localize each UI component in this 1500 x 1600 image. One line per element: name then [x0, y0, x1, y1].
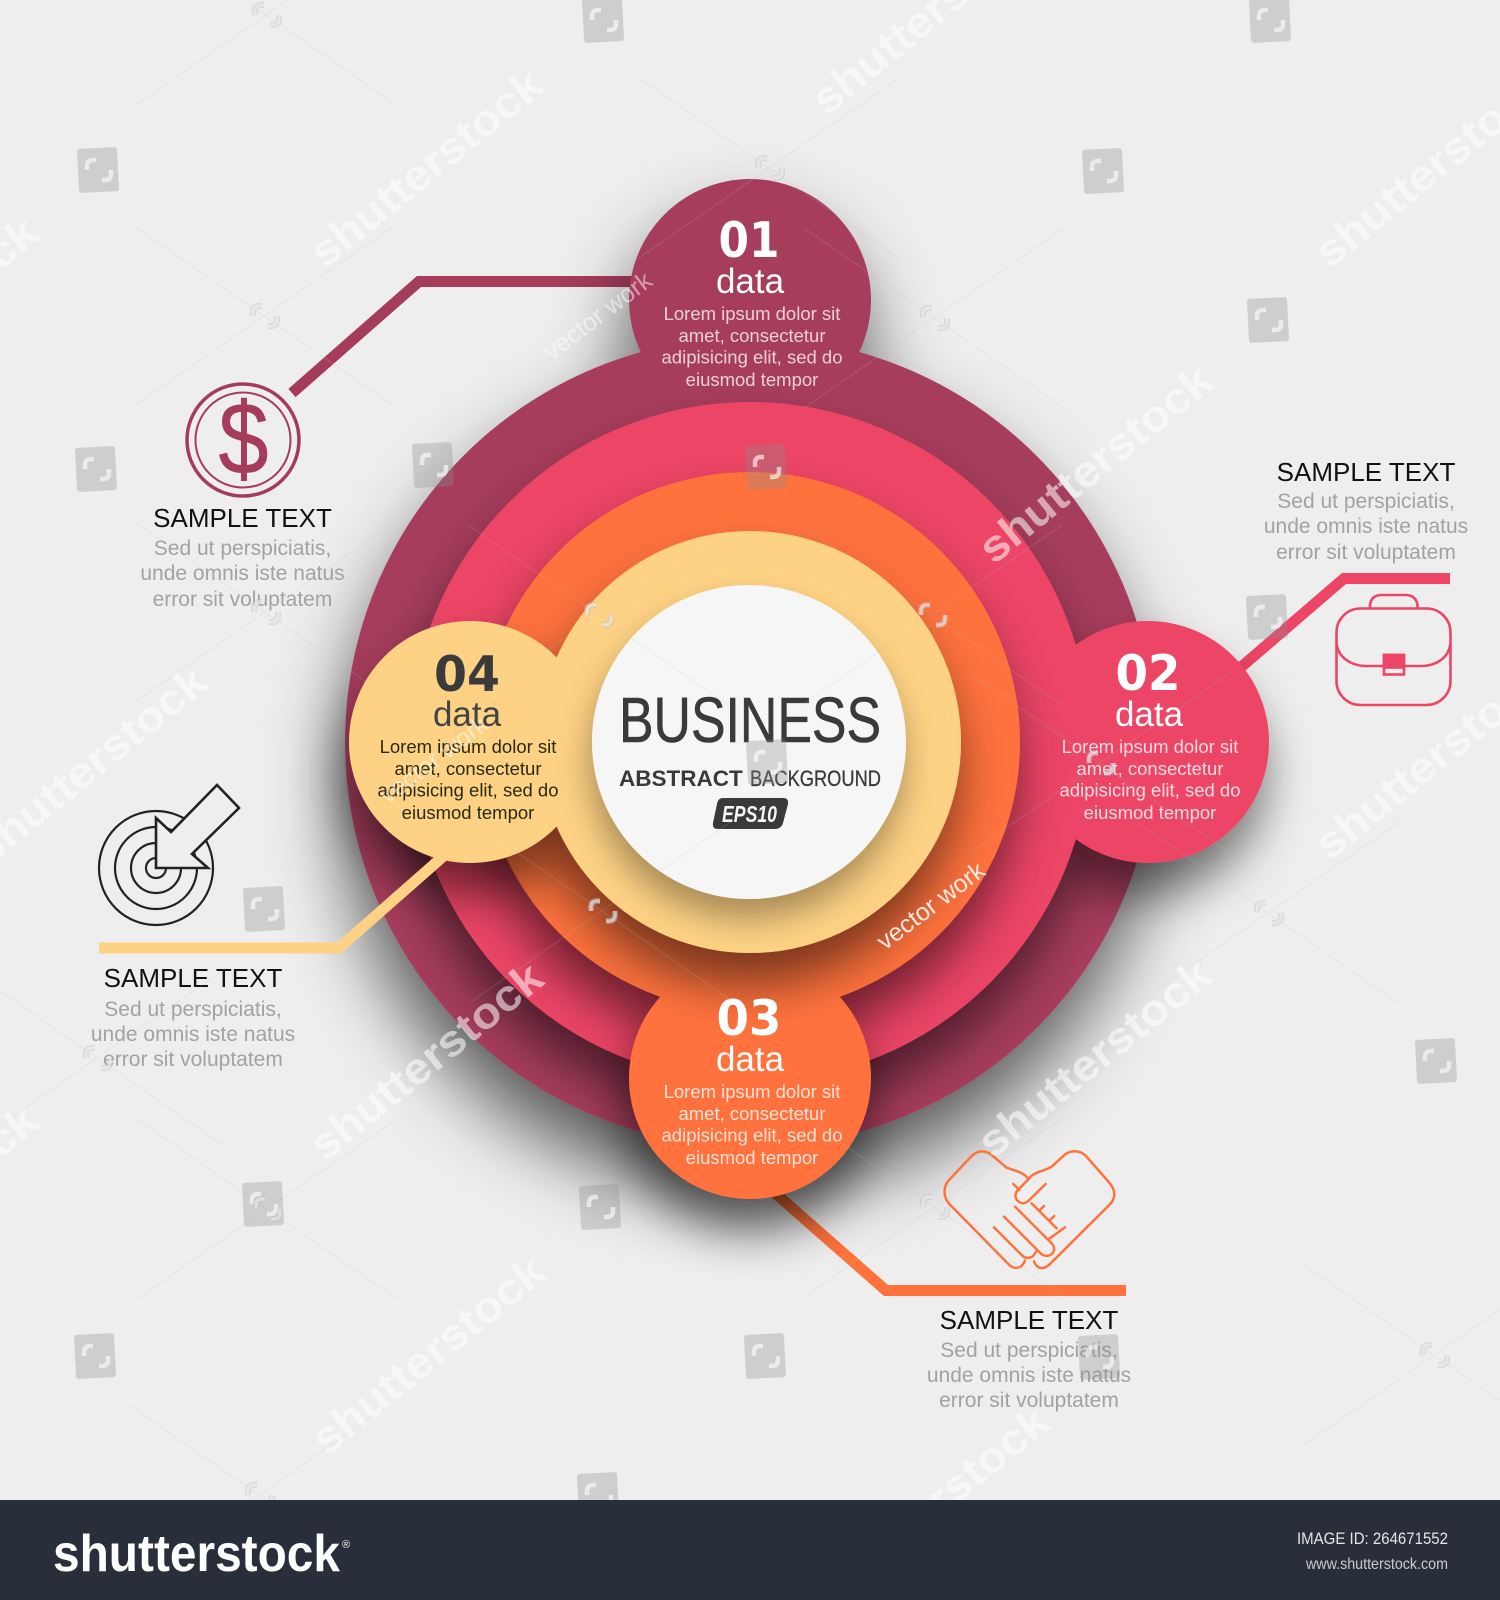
node 03 text: amet, consectetur	[678, 1103, 826, 1124]
text block: top left: Sed ut perspiciatis,	[154, 537, 331, 560]
text block: top right	[1264, 457, 1468, 564]
text block: top left: SAMPLE TEXT	[153, 503, 332, 533]
node 02 text: adipisicing elit, sed do	[1060, 780, 1240, 800]
footer image id: IMAGE ID: 264671552	[1297, 1529, 1448, 1548]
central title	[619, 684, 881, 791]
connector line 03	[775, 1193, 1126, 1290]
text block: top left: unde omnis iste natus	[140, 562, 345, 585]
footer bar	[0, 1500, 1500, 1600]
text block: top left: error sit voluptatem	[153, 588, 332, 611]
node 04 text: adipisicing elit, sed do	[378, 780, 558, 800]
node 03 text: Lorem ipsum dolor sit	[664, 1081, 840, 1102]
text block: bottom right: Sed ut perspiciatis,	[940, 1339, 1118, 1362]
node 04 text: amet, consectetur	[394, 758, 542, 779]
node 04 text: data	[433, 695, 502, 734]
yellow ring with node 04	[349, 531, 961, 953]
central title: ABSTRACT	[619, 766, 743, 791]
footer logo registered mark: ®	[342, 1539, 350, 1551]
node 03 text: eiusmod tempor	[686, 1147, 818, 1168]
watermark overlay: shutterstock	[300, 952, 553, 1170]
node 03 text: data	[716, 1040, 785, 1079]
outer ring with node 01	[345, 179, 1155, 1147]
text block: top right: unde omnis iste natus	[1264, 515, 1468, 538]
icon: dollar coin	[187, 382, 299, 496]
watermark overlay: vector work	[539, 266, 658, 366]
node 01 text: data	[716, 262, 785, 301]
icon: handshake	[945, 1151, 1114, 1268]
watermark overlay: shutterstock	[968, 949, 1221, 1167]
connector line 04	[99, 853, 447, 948]
EPS10 badge: EPS10	[722, 801, 777, 827]
node 02 text	[1060, 645, 1240, 823]
icon: dollar coin: $	[218, 382, 268, 496]
text block: left: SAMPLE TEXT	[104, 963, 282, 993]
text block: top right: SAMPLE TEXT	[1277, 457, 1455, 487]
node 02 text: data	[1115, 695, 1184, 734]
pink ring with node 02	[410, 402, 1269, 1082]
text block: left	[91, 963, 295, 1071]
node 01 text: eiusmod tempor	[686, 369, 818, 390]
node 01 text: amet, consectetur	[678, 325, 826, 346]
node 01 text	[662, 212, 842, 390]
node 04 text: 04	[434, 646, 500, 703]
node 01 text: 01	[718, 212, 780, 269]
node 01 text: adipisicing elit, sed do	[662, 346, 842, 368]
text block: bottom right	[927, 1305, 1131, 1412]
watermark overlay: vector work	[375, 710, 494, 810]
central title: BUSINESS	[619, 684, 881, 756]
node 04 text	[378, 646, 558, 823]
watermark overlay: shutterstock	[969, 355, 1222, 573]
node 02 text: amet, consectetur	[1076, 758, 1224, 779]
EPS10 badge	[713, 798, 788, 829]
node 03 text: 03	[716, 990, 782, 1047]
text block: left: unde omnis iste natus	[91, 1023, 295, 1046]
connector line 01	[292, 282, 640, 393]
icon: target with arrow	[99, 785, 239, 925]
text block: top right: error sit voluptatem	[1276, 541, 1456, 564]
connector line 02	[1240, 578, 1450, 668]
node 02 text: 02	[1116, 645, 1180, 702]
text block: top left	[140, 503, 345, 611]
node 04 text: Lorem ipsum dolor sit	[380, 736, 556, 757]
node 03 text	[662, 990, 842, 1168]
footer url: www.shutterstock.com	[1305, 1556, 1448, 1573]
central title: BACKGROUND	[750, 766, 881, 791]
watermark overlay: shutterstock	[302, 1246, 555, 1464]
watermark overlay: shutterstock	[300, 59, 553, 277]
text block: bottom right: error sit voluptatem	[939, 1389, 1119, 1412]
text block: bottom right: SAMPLE TEXT	[940, 1305, 1118, 1335]
text block: bottom right: unde omnis iste natus	[927, 1364, 1131, 1387]
orange ring with node 03	[480, 472, 1020, 1199]
watermark overlay: vector work	[872, 856, 991, 956]
node 01 text: Lorem ipsum dolor sit	[664, 303, 840, 324]
text block: top right: Sed ut perspiciatis,	[1277, 490, 1455, 513]
icon: briefcase	[1336, 595, 1450, 705]
node 02 text: Lorem ipsum dolor sit	[1062, 736, 1238, 757]
node 04 text: eiusmod tempor	[402, 802, 534, 823]
node 02 text: eiusmod tempor	[1084, 802, 1216, 823]
text block: left: Sed ut perspiciatis,	[104, 998, 282, 1021]
footer logo: shutterstock	[53, 1525, 340, 1583]
central white circle	[592, 585, 906, 899]
node 03 text: adipisicing elit, sed do	[662, 1124, 842, 1146]
text block: left: error sit voluptatem	[103, 1048, 283, 1071]
